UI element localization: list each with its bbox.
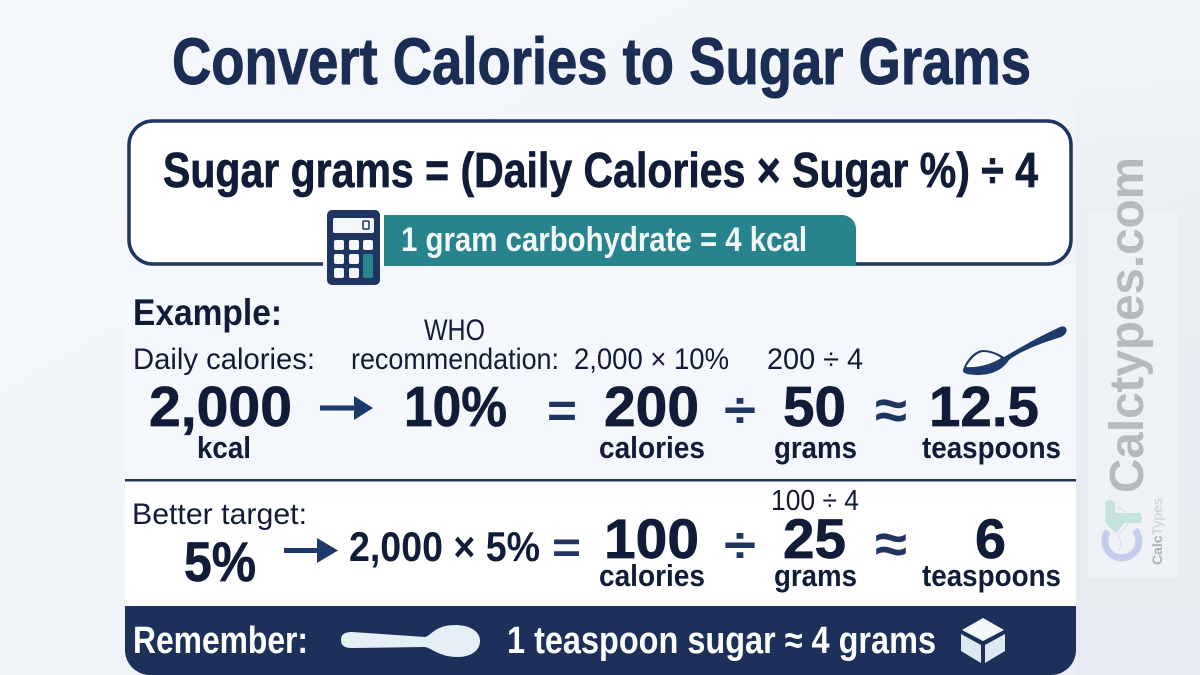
title: Convert Calories to Sugar Grams [172, 24, 1031, 98]
banner: remember: Remember: [133, 620, 308, 662]
note: carbohydrate: 1 gram carbohydrate = 4 kcal [401, 221, 807, 259]
value: 25 grams: 25 [783, 507, 846, 570]
value: 100 calories [599, 507, 705, 593]
icon: spoon [341, 625, 480, 657]
row: 2,000 kcal: kcal [197, 430, 251, 465]
value: 6 teaspoons [922, 507, 1061, 593]
watermark: logo: CalcTypes [1149, 498, 1165, 565]
divide sign: ÷ [724, 517, 756, 573]
value: 10%: 10% [404, 375, 507, 439]
equals sign: = [552, 523, 581, 572]
value: 50 grams [767, 343, 863, 465]
panel: formula box [129, 121, 1071, 285]
approx sign: ≈ [875, 512, 907, 575]
icon: sugar spoon [963, 326, 1067, 375]
icon: sugar cube [961, 618, 1005, 663]
value: 25 grams: 100 ÷ 4 [771, 485, 859, 517]
value: 25 grams [771, 485, 859, 593]
arrow [284, 538, 338, 563]
banner: remember: 1 teaspoon sugar ≈ 4 grams [507, 620, 936, 662]
value: 12.5 teaspoons: 12.5 [929, 375, 1039, 439]
value: 12.5 teaspoons: teaspoons [922, 430, 1061, 465]
row: better target 5% [132, 498, 307, 593]
panel: example background [125, 265, 1076, 480]
row: 2,000 kcal: Daily calories: [133, 343, 315, 376]
divide sign: ÷ [724, 382, 756, 438]
equals sign: = [547, 385, 577, 438]
approx sign: ≈ [875, 378, 907, 441]
panel: better target background [125, 481, 1076, 607]
value: 200 calories: 200 [604, 375, 699, 439]
value: 100 calories: calories [599, 558, 705, 593]
value: 25 grams: grams [774, 558, 857, 593]
formula text: Sugar grams = (Daily Calories × Sugar %) ÷ 4 [163, 144, 1038, 198]
arrow [320, 396, 373, 420]
value: 10% [351, 314, 559, 439]
value: 200 calories: calories [599, 430, 705, 465]
value: 6 teaspoons: 6 [975, 507, 1006, 570]
value: 50 grams: grams [774, 430, 857, 465]
value: 6 teaspoons: teaspoons [922, 558, 1061, 593]
value: 50 grams: 200 ÷ 4 [767, 343, 863, 376]
banner: remember [123, 606, 1076, 675]
value: 100 calories: 100 [604, 507, 699, 570]
row: 2,000 kcal: 2,000 [149, 375, 292, 439]
icon: calculator [323, 206, 384, 285]
value: 200 calories [574, 343, 729, 465]
watermark: site name: Calctypes.com [1101, 157, 1154, 493]
row: better target 5%: Better target: [132, 498, 307, 531]
value: 200 calories: 2,000 × 10% [574, 343, 729, 376]
divider [125, 479, 1076, 482]
heading: example: Example: [133, 292, 282, 333]
calculation: 2,000 × 5%: 2,000 × 5% [349, 523, 540, 570]
value: 10%: recommendation: [351, 343, 559, 376]
value: 10%: WHO [424, 314, 485, 347]
row: 2,000 kcal [133, 343, 315, 465]
value: 12.5 teaspoons [922, 375, 1061, 465]
value: 50 grams: 50 [783, 375, 846, 439]
watermark: logo [1105, 498, 1165, 565]
row: better target 5%: 5% [184, 530, 256, 593]
